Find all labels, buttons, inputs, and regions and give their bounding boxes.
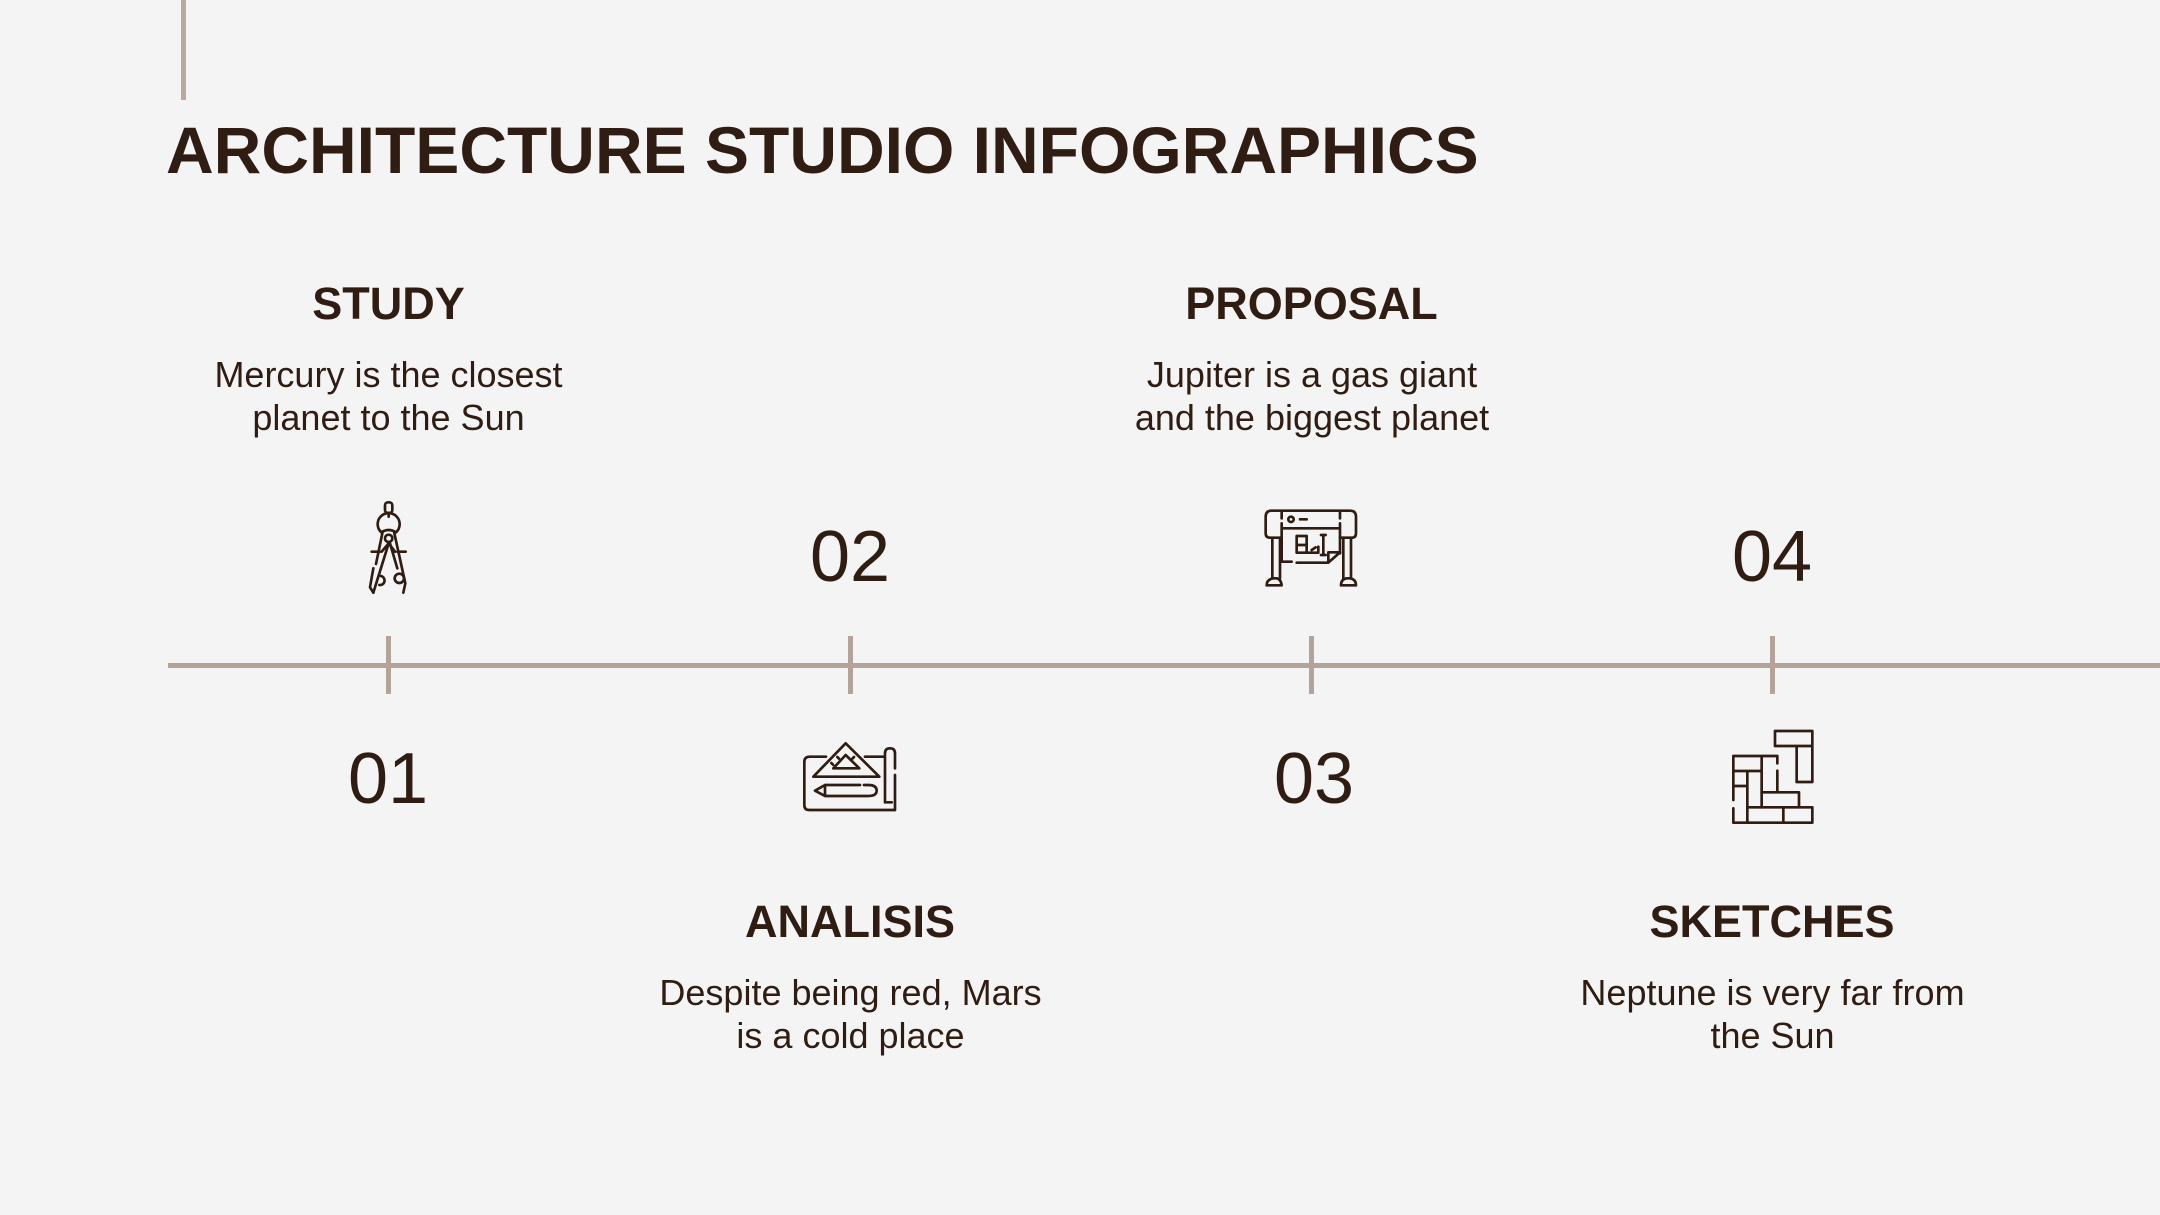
- description: proposal: and the biggest planet: [1135, 397, 1489, 438]
- number 01: 01: [348, 739, 428, 819]
- number 03: 03: [1274, 739, 1354, 819]
- description: analisis: is a cold place: [736, 1015, 965, 1056]
- title: ARCHITECTURE STUDIO INFOGRAPHICS: [166, 113, 1479, 187]
- timeline: [168, 636, 2160, 694]
- description: study: planet to the Sun: [252, 397, 525, 438]
- icon: floor plan blocks: [1733, 731, 1812, 823]
- step 04: sketches: [1580, 517, 1965, 1056]
- description: sketches: Neptune is very far from: [1580, 972, 1965, 1013]
- icon: plotter printer: [1266, 511, 1356, 585]
- step 03: proposal: [1135, 278, 1489, 819]
- description: analisis: Despite being red, Mars: [659, 972, 1042, 1013]
- number 02: 02: [810, 517, 890, 597]
- heading: proposal: PROPOSAL: [1185, 278, 1438, 329]
- heading: sketches: SKETCHES: [1649, 896, 1895, 947]
- icon: set square and pencil on blueprint: [804, 743, 895, 810]
- description: proposal: Jupiter is a gas giant: [1147, 354, 1477, 395]
- number 04: 04: [1732, 517, 1812, 597]
- top accent line: [181, 0, 186, 100]
- heading: study: STUDY: [312, 278, 465, 329]
- step 02: analisis: [659, 517, 1042, 1056]
- heading: analisis: ANALISIS: [745, 896, 955, 947]
- description: sketches: the Sun: [1710, 1015, 1835, 1056]
- icon: drafting compass: [370, 502, 406, 593]
- description: study: Mercury is the closest: [214, 354, 563, 395]
- step 01: study: [214, 278, 563, 819]
